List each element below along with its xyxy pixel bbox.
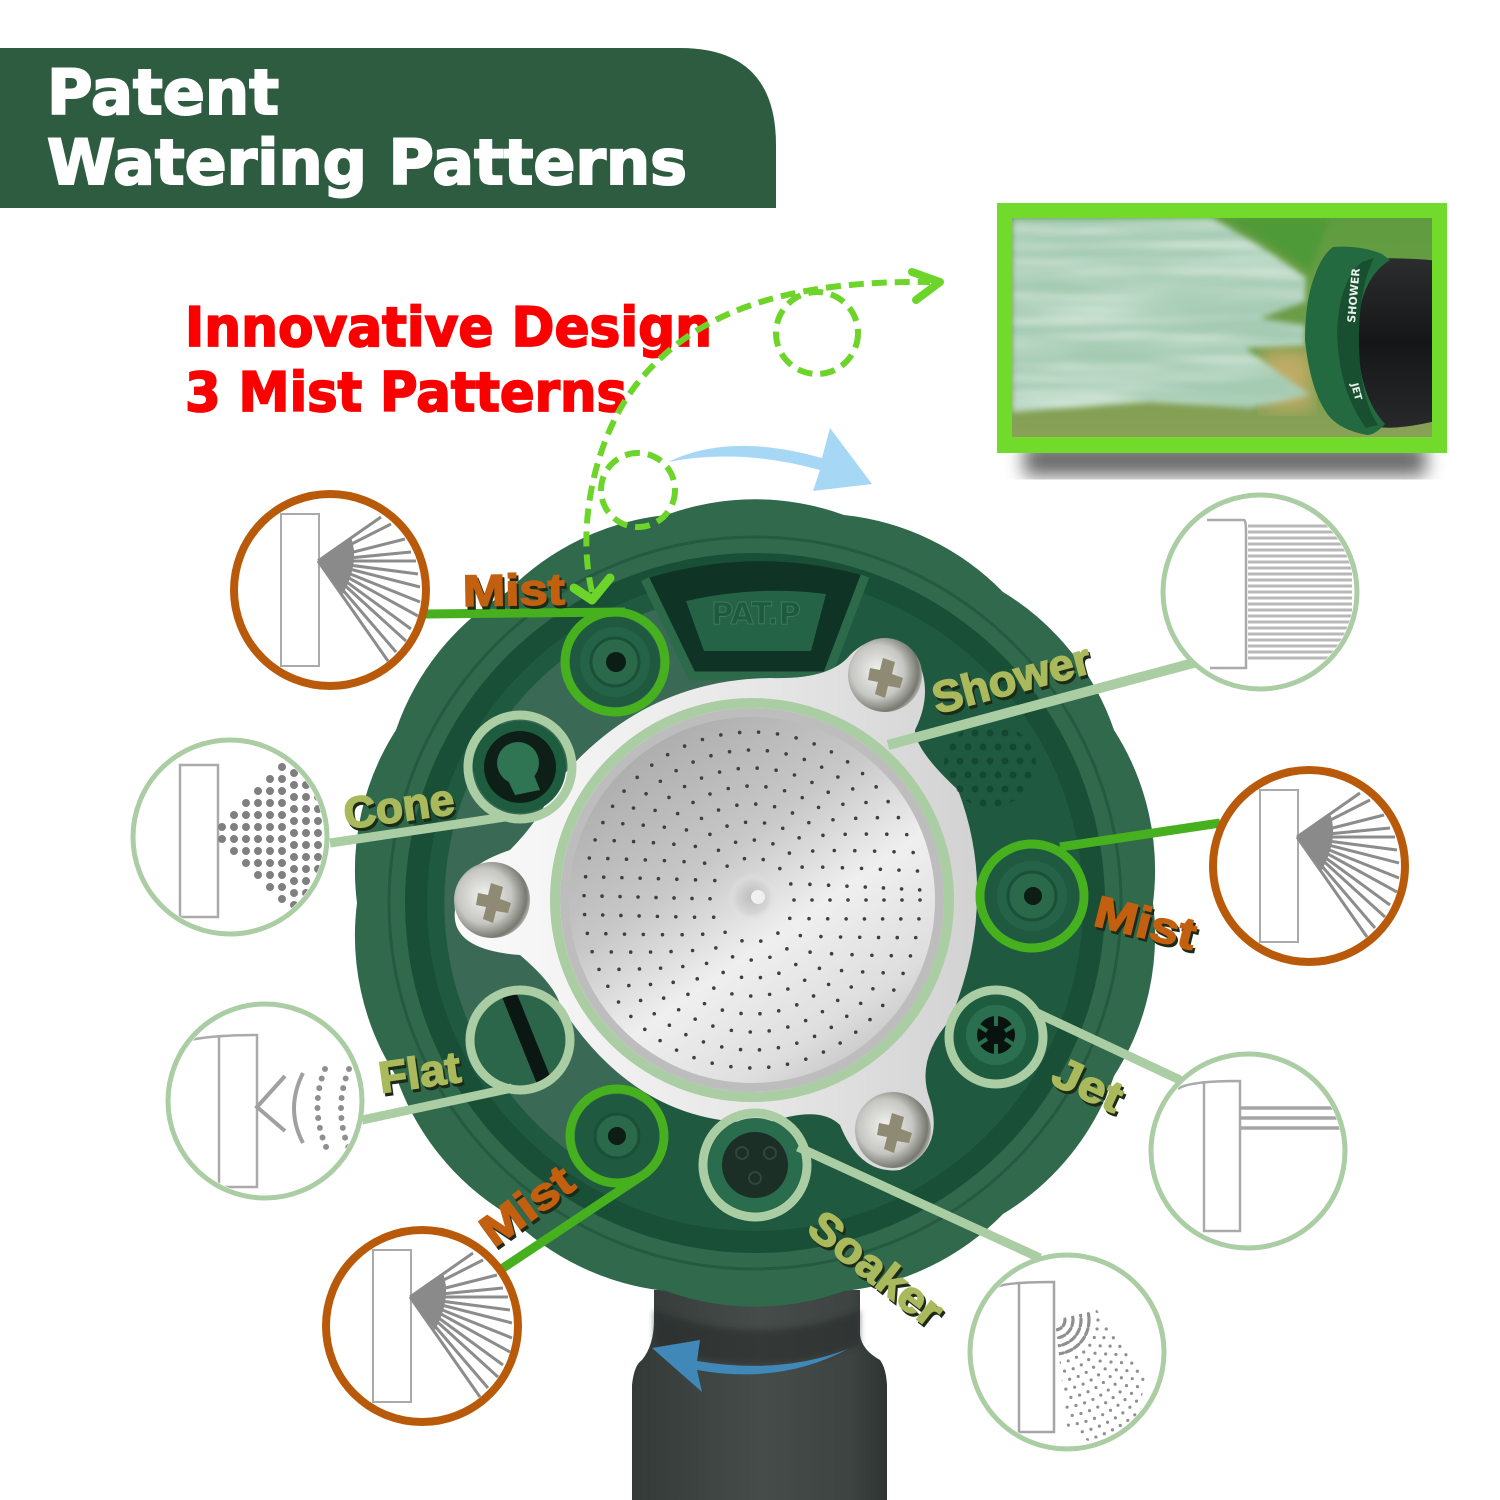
title: Watering Patterns [47,126,687,199]
callout: jet [1151,1054,1345,1248]
headline text: 3 Mist Patterns [185,361,627,424]
callout: mist top left [234,494,426,686]
nozzle: soaker [708,1118,802,1212]
perforated dish [560,708,944,1092]
label: mist top: Mist [462,565,566,616]
label: flat: Flat [376,1043,464,1103]
nozzle: mist top [570,617,660,707]
callout: soaker [968,1252,1166,1452]
headline text: Innovative Design [185,296,712,359]
label: jet: Jet [1045,1048,1131,1123]
callout: shower [1163,495,1357,689]
label: soaker: Soaker [799,1201,953,1337]
callout: flat [168,1004,362,1198]
screw top right [848,638,922,712]
blue rotation arrow bottom [652,1340,848,1392]
connector rings: mist [425,612,1220,1268]
header banner [0,48,776,208]
label: shower: Shower [927,634,1096,724]
callout: mist bottom [326,1230,518,1422]
silver plate [455,640,977,1170]
nozzle: jet [954,995,1038,1079]
hose handle [632,1290,887,1500]
PAT.P slider window [645,561,865,676]
label: cone: Cone [341,775,457,839]
blue rotation arrow top [668,428,872,491]
nozzle: mist bottom [575,1094,659,1178]
title [47,56,687,199]
dashed green arrow [574,272,940,600]
label: mist right: Mist [1090,887,1202,960]
sprayer head [355,499,1155,1307]
PAT.P slider window: PAT.P [711,597,801,632]
screw bottom right [855,1092,931,1168]
screw left [454,862,530,938]
photo: nozzle spraying water: JET [1348,381,1363,402]
dimple texture [944,730,1036,806]
nozzle: mist right [986,850,1078,942]
label: mist bottom: Mist [471,1156,584,1256]
title: Patent [47,56,279,129]
nozzle: cone [474,721,566,813]
photo: nozzle spraying water: SHOWER [1345,267,1363,323]
photo: nozzle spraying water [997,203,1447,476]
callout: mist right [1213,770,1405,962]
central ring and connector to shower [555,662,1197,1097]
nozzle: flat [475,994,565,1085]
headline text [185,296,712,424]
connector rings: cone, flat, jet, soaker [330,715,1180,1258]
callout: cone [133,740,327,934]
